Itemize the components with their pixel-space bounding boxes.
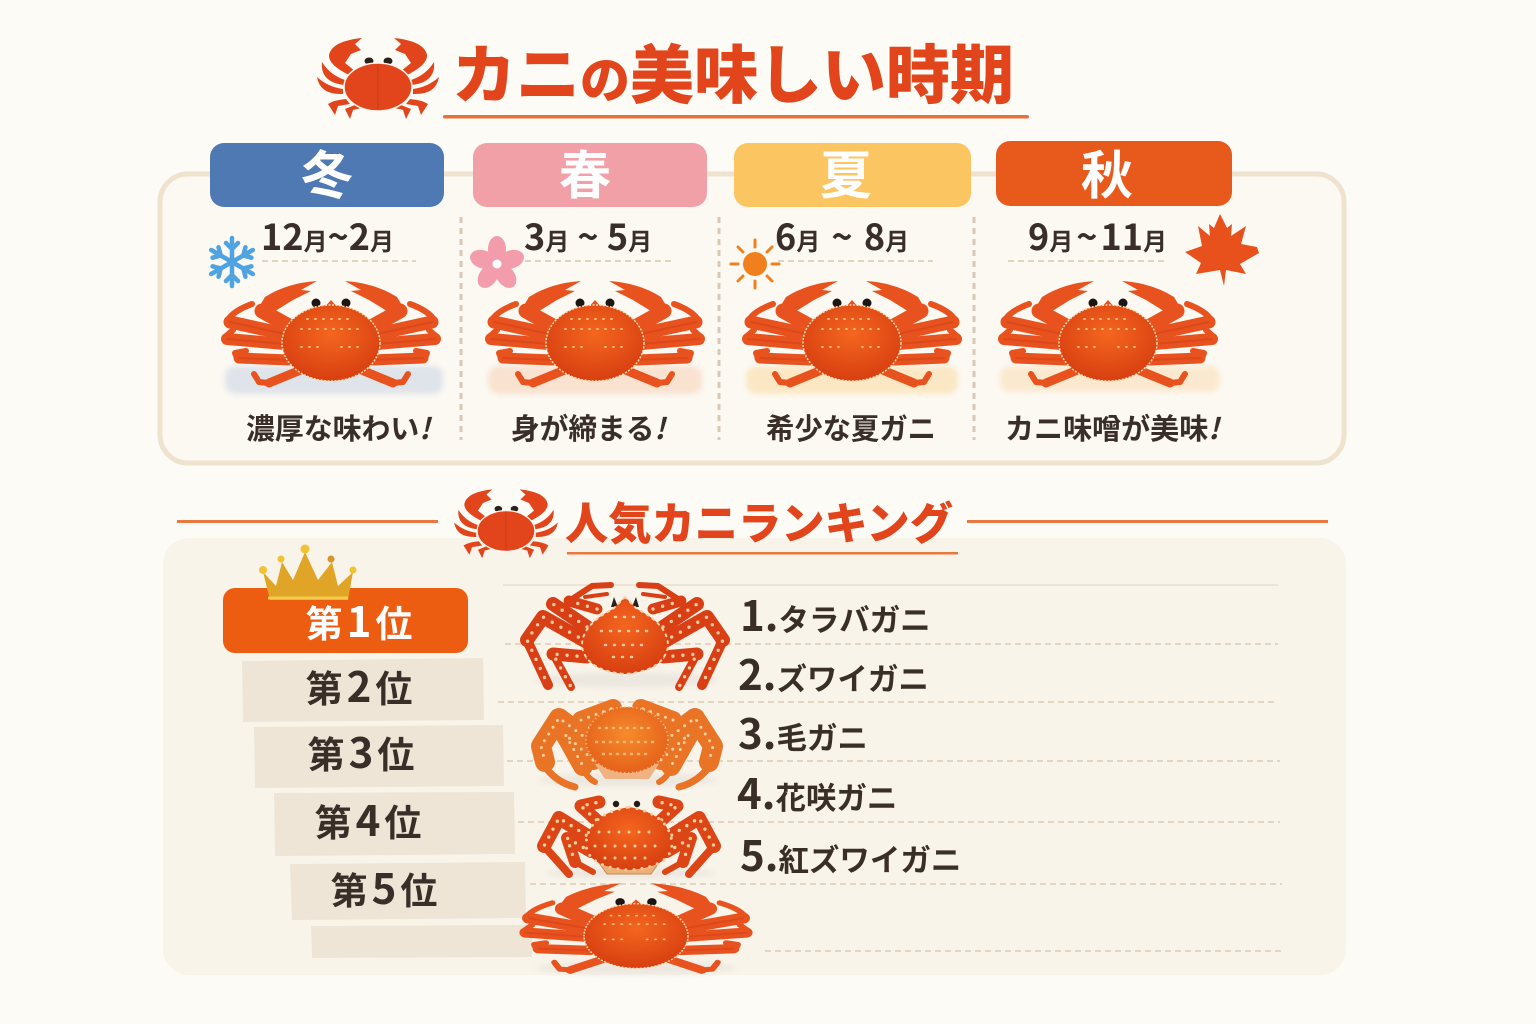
list rules xyxy=(498,585,1282,951)
icon: crown xyxy=(259,544,356,600)
blank step xyxy=(311,925,532,958)
icon: ranking crab xyxy=(454,489,558,558)
title underline xyxy=(443,115,1029,118)
rank 1 xyxy=(223,588,468,653)
icon: snowflake xyxy=(208,238,256,286)
column: winter xyxy=(208,134,444,448)
item 5: 5.紅ズワイガニ xyxy=(740,823,961,884)
winter crab xyxy=(225,281,443,394)
divider xyxy=(972,217,976,440)
ranking list xyxy=(498,583,1282,975)
icon: cherry blossom xyxy=(468,236,526,292)
spring crab xyxy=(488,281,702,394)
summer dates: 6月 ~ 8月 xyxy=(775,209,909,261)
winter header: 冬 xyxy=(301,134,353,209)
crab: hairy xyxy=(538,707,718,787)
autumn header xyxy=(996,134,1232,209)
panel: ranking background xyxy=(163,538,1346,975)
winter dates: 12月~2月 xyxy=(261,209,394,261)
divider xyxy=(718,217,720,440)
summer caption: 希少な夏ガニ xyxy=(766,406,936,448)
crab: red snow xyxy=(524,883,748,975)
panel: seasons xyxy=(160,134,1344,463)
autumn header: 秋 xyxy=(1081,134,1133,209)
title xyxy=(317,25,1029,119)
icon: sun xyxy=(731,240,779,288)
spring caption: 身が締まる! xyxy=(511,406,668,448)
divider xyxy=(460,217,462,440)
rank 5: 第5位 xyxy=(331,856,437,917)
ranking ladder xyxy=(223,544,532,958)
ranking underline xyxy=(567,552,958,554)
spring header: 春 xyxy=(559,134,611,209)
rank 2 xyxy=(242,654,484,722)
winter caption: 濃厚な味わい! xyxy=(246,406,433,448)
icon: maple leaf xyxy=(1185,214,1259,286)
rank 4 xyxy=(274,788,515,856)
left rule xyxy=(177,520,438,523)
date underlines xyxy=(262,260,1165,262)
autumn dates: 9月~11月 xyxy=(1028,209,1167,261)
seasons panel frame xyxy=(160,174,1344,463)
rank 3 xyxy=(254,720,504,788)
rank 1: 第1位 xyxy=(306,589,412,650)
crab: flower xyxy=(544,801,715,879)
item 2: 2.ズワイガニ xyxy=(738,642,929,703)
column: summer xyxy=(731,134,971,448)
right rule xyxy=(967,520,1328,523)
winter header xyxy=(210,134,444,209)
ranking heading xyxy=(177,488,1328,558)
icon: title crab xyxy=(317,38,439,119)
spring dates: 3月 ~ 5月 xyxy=(524,209,652,261)
summer header xyxy=(734,134,971,209)
summer header: 夏 xyxy=(820,134,872,209)
rank 2: 第2位 xyxy=(306,654,412,715)
item 3: 3.毛ガニ xyxy=(738,701,868,762)
autumn caption: カニ味噌が美味! xyxy=(1005,406,1222,448)
item 4: 4.花咲ガニ xyxy=(737,761,897,822)
summer crab xyxy=(746,281,958,394)
ranking title: 人気カニランキング xyxy=(565,488,953,552)
rank 5 xyxy=(290,856,526,920)
crab: king xyxy=(527,585,723,688)
spring header xyxy=(473,134,707,209)
title text: カニの美味しい時期 xyxy=(452,25,1014,117)
column: spring xyxy=(468,134,707,448)
item 1: 1.タラバガニ xyxy=(740,583,931,644)
autumn crab xyxy=(1000,281,1220,392)
rank 4: 第4位 xyxy=(315,788,421,849)
rank 3: 第3位 xyxy=(308,720,414,781)
column: autumn xyxy=(996,134,1259,448)
